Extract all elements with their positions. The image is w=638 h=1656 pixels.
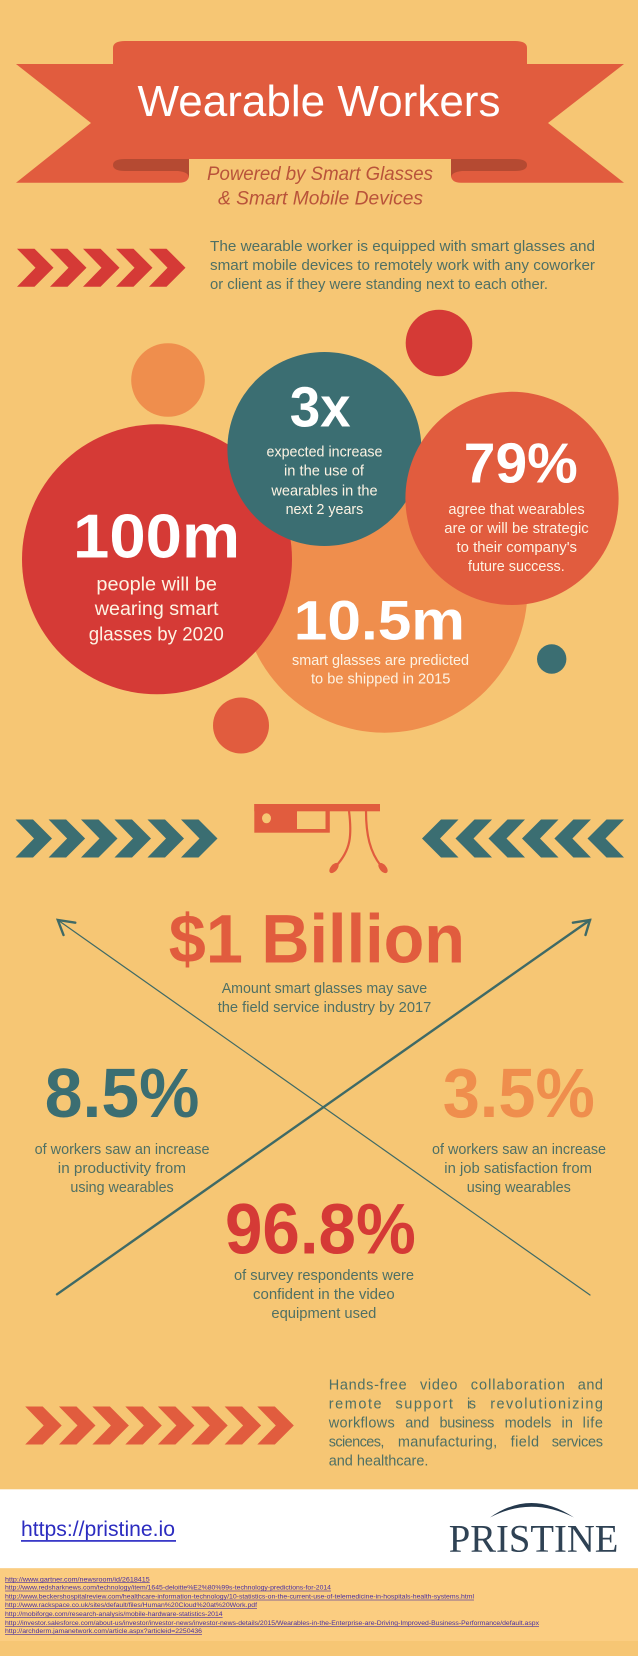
stat: 10.5m — [292, 588, 469, 687]
decorative circle: small teal — [537, 644, 566, 674]
closing paragraph: Hands-free — [329, 1377, 407, 1393]
closing paragraph: collaboration — [471, 1377, 565, 1393]
stat: 10.5m: 10.5m — [294, 588, 465, 651]
logo: Pristine: PRISTINE — [449, 1518, 618, 1561]
decorative circle: small red — [406, 310, 472, 376]
circle: 3x — [227, 352, 421, 546]
closing paragraph: field — [511, 1434, 539, 1450]
stat: 10.5m: to be shipped in 2015 — [311, 670, 450, 687]
closing paragraph: support — [396, 1396, 453, 1412]
closing paragraph: and healthcare. — [329, 1454, 428, 1470]
stat: 79%: are or will be strategic — [444, 520, 589, 537]
stat: 8.5%: in productivity from — [58, 1160, 186, 1177]
stat: $1 Billion: $1 Billion — [169, 901, 465, 978]
title ribbon — [16, 41, 624, 183]
stat: 100m — [73, 502, 240, 646]
reference links — [5, 1576, 540, 1635]
reference links: http://www.gartner.com/newsroom/id/2618415 — [5, 1576, 150, 1583]
stat: $1 Billion — [169, 901, 465, 1016]
footer white band — [0, 1489, 638, 1568]
closing paragraph: manufacturing, — [398, 1434, 497, 1450]
closing paragraph — [328, 1377, 603, 1470]
reference links: http://archderm.jamanetwork.com/article.aspx?articleid=2250436 — [5, 1628, 203, 1635]
closing paragraph: revolutionizing — [490, 1396, 603, 1412]
stat: 3x: in the use of — [284, 463, 365, 480]
closing paragraph: remote — [329, 1396, 382, 1412]
stat: 3.5%: 3.5% — [443, 1054, 595, 1132]
intro text: smart mobile devices to remotely work with any coworker — [210, 257, 595, 274]
stat: 79%: 79% — [464, 432, 578, 496]
reference links: http://www.beckershospitalreview.com/healthcare-information-technology/10-statistics-on-the-current-use-of-telemedicine-in-hospitals-health-systems.html — [5, 1594, 474, 1601]
subtitle: Powered by Smart Glasses — [207, 163, 433, 185]
stat: 3x — [266, 376, 382, 518]
website link: https://pristine.io — [21, 1518, 175, 1541]
references band — [0, 1568, 638, 1641]
stat: 3.5% — [432, 1054, 606, 1196]
stat: 100m: glasses by 2020 — [89, 625, 224, 646]
stat: 96.8%: equipment used — [271, 1305, 376, 1322]
closing paragraph: services — [552, 1434, 603, 1450]
stat: 8.5%: 8.5% — [45, 1054, 199, 1132]
reference links: http://www.redsharknews.com/technology/item/1645-deloitte%E2%80%99s-technology-predictions-for-2014 — [5, 1585, 332, 1592]
closing paragraph: and — [405, 1415, 429, 1431]
icon: orange chevrons — [25, 1406, 294, 1444]
stat: 96.8%: of survey respondents were — [234, 1267, 414, 1284]
closing paragraph: workflows — [328, 1415, 395, 1431]
closing paragraph: in — [562, 1415, 573, 1431]
arrow: thick, up-right — [57, 920, 590, 1294]
stat: $1 Billion: the field service industry by 2017 — [218, 999, 431, 1016]
icon: red chevrons — [17, 249, 186, 287]
stat: 8.5% — [35, 1054, 209, 1196]
reference links: http://investor.salesforce.com/about-us/investor/investor-news/investor-news-details/2015/Wearables-in-the-Enterprise-are-Driving-Improved-Business-Performance/default.aspx — [5, 1620, 540, 1627]
stat: 3x: expected increase — [266, 444, 382, 461]
stat: 96.8% — [225, 1190, 416, 1322]
icon: smart glasses — [254, 804, 389, 875]
closing paragraph: is — [467, 1396, 476, 1412]
stat: 3.5%: of workers saw an increase — [432, 1141, 606, 1158]
subtitle: & Smart Mobile Devices — [218, 188, 423, 210]
stat: 3.5%: in job satisfaction from — [444, 1160, 592, 1177]
stat: 8.5%: using wearables — [70, 1179, 174, 1196]
stat: 3x: wearables in the — [270, 483, 378, 500]
reference links: http://www.rackspace.co.uk/sites/default/files/Human%20Cloud%20at%20Work.pdf — [5, 1602, 257, 1609]
stat: 3x: 3x — [290, 376, 351, 440]
closing paragraph: business — [440, 1415, 494, 1431]
icon: teal chevrons right — [422, 820, 624, 858]
subtitle — [207, 163, 433, 210]
intro text: The wearable worker is equipped with smart glasses and — [210, 238, 595, 255]
stat: 100m: wearing smart — [94, 599, 219, 620]
closing paragraph: life — [583, 1415, 603, 1431]
arrow: thin, up-left — [58, 920, 590, 1295]
stat: 8.5%: of workers saw an increase — [35, 1141, 209, 1158]
stat: 100m: 100m — [73, 502, 240, 571]
decorative circle: small orange — [131, 343, 205, 417]
closing paragraph: sciences, — [329, 1434, 384, 1450]
circle: 10.5m — [242, 447, 528, 733]
reference links: http://mobiforge.com/research-analysis/mobile-hardware-statistics-2014 — [5, 1611, 223, 1618]
intro text: or client as if they were standing next to each other. — [210, 276, 548, 293]
stat: 100m: people will be — [96, 575, 217, 596]
closing paragraph: and — [578, 1377, 603, 1393]
stat: $1 Billion: Amount smart glasses may save — [222, 980, 427, 997]
stat: 79%: future success. — [468, 558, 565, 575]
stat: 3x: next 2 years — [286, 501, 363, 518]
circle: 100m — [22, 424, 292, 694]
stat: 10.5m: smart glasses are predicted — [292, 652, 469, 669]
circle: 79% — [405, 392, 619, 605]
intro text — [210, 238, 595, 293]
closing paragraph: video — [420, 1377, 457, 1393]
stat: 79%: to their company's — [456, 539, 577, 556]
stat: 79% — [444, 432, 589, 575]
icon: teal chevrons left — [16, 820, 218, 858]
stat: 96.8%: 96.8% — [225, 1190, 416, 1269]
stat: 79%: agree that wearables — [448, 501, 585, 518]
stat: 96.8%: confident in the video — [253, 1286, 395, 1303]
title: Wearable Workers — [138, 77, 500, 126]
decorative circle: small orange-red — [213, 698, 269, 754]
stat: 3.5%: using wearables — [467, 1179, 571, 1196]
closing paragraph: models — [505, 1415, 551, 1431]
